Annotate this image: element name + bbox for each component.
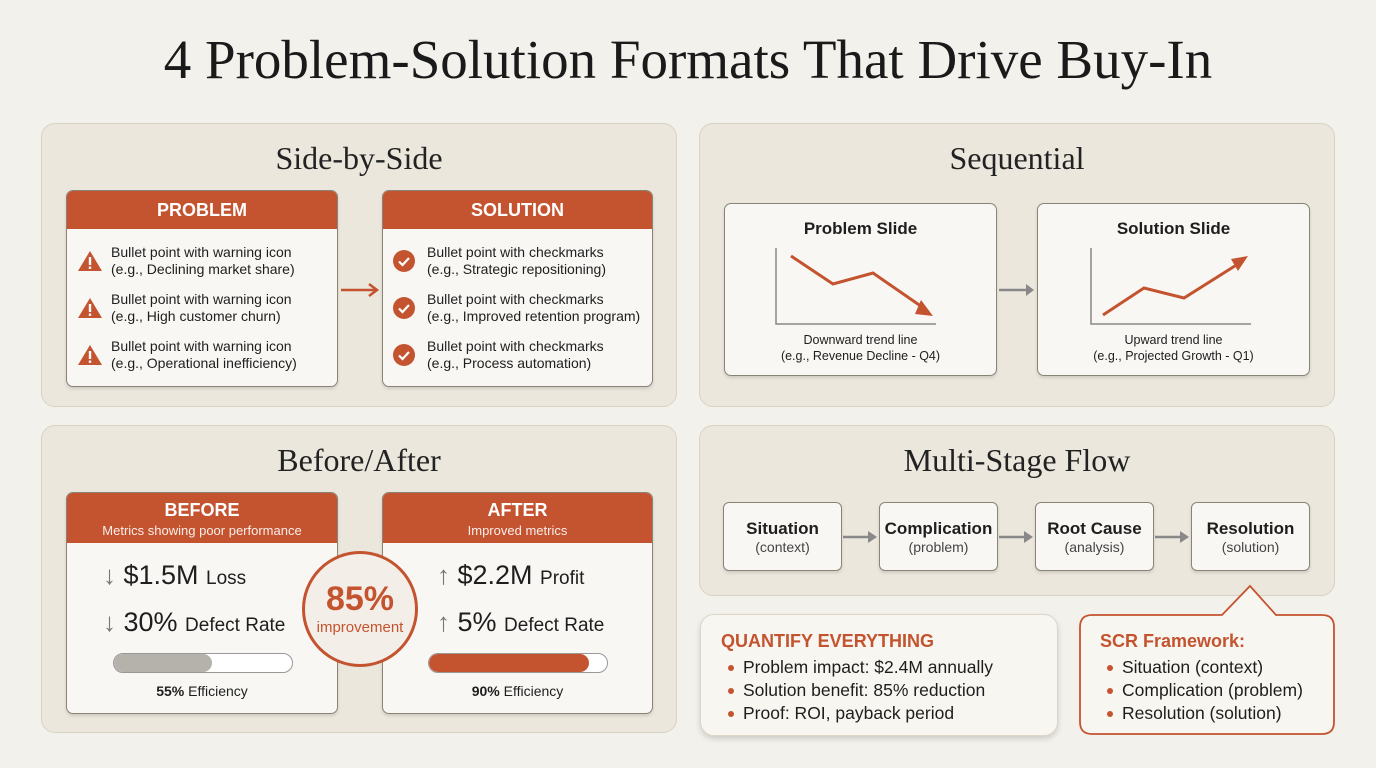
progress bar 90% xyxy=(428,653,608,673)
callout: quantify everything: QUANTIFY EVERYTHING xyxy=(721,631,934,651)
card: solution: Bullet point with checkmarks xyxy=(427,291,604,307)
card: after: Improved metrics xyxy=(468,523,567,538)
panel: sequential xyxy=(699,123,1335,407)
problem item 1 xyxy=(78,244,295,277)
callout: quantify everything: Solution benefit: 85% reduction xyxy=(743,680,985,700)
callout: quantify everything: Problem impact: $2.4M annually xyxy=(743,657,993,677)
card: problem xyxy=(66,190,338,387)
stage: situation: (context) xyxy=(755,539,810,555)
card: problem: Bullet point with warning icon xyxy=(111,338,292,354)
card: solution slide xyxy=(1037,203,1310,376)
callout: 85% improvement circle: improvement xyxy=(317,619,403,636)
card: solution: Bullet point with checkmarks xyxy=(427,244,604,260)
card: solution slide: Upward trend line xyxy=(1125,333,1222,347)
heading: multi-stage flow: Multi-Stage Flow xyxy=(904,442,1130,478)
metric: defect rate: ↓ 30% Defect Rate xyxy=(103,607,285,637)
arrow xyxy=(1155,531,1189,543)
arrow xyxy=(999,531,1033,543)
heading: side-by-side: Side-by-Side xyxy=(275,140,443,176)
stage: resolution: (solution) xyxy=(1222,539,1279,555)
heading: before/after: Before/After xyxy=(277,442,441,478)
card: problem slide: Downward trend line xyxy=(804,333,917,347)
card: problem slide xyxy=(724,203,997,376)
callout: SCR framework: Complication (problem) xyxy=(1122,680,1303,700)
chart: downward trend xyxy=(775,248,936,325)
card: solution: SOLUTION xyxy=(471,200,564,220)
card: before: Metrics showing poor performance xyxy=(102,523,302,538)
callout: quantify everything xyxy=(700,614,1058,736)
callout: 85% improvement circle xyxy=(302,551,418,667)
card: problem: (e.g., Declining market share) xyxy=(111,261,295,277)
title: 4 Problem-Solution Formats That Drive Buy-In xyxy=(164,29,1212,90)
callout: SCR framework: SCR Framework: xyxy=(1100,631,1245,651)
metric: loss: ↓ $1.5M Loss xyxy=(103,560,246,590)
panel: multi-stage flow xyxy=(699,425,1335,596)
card: before xyxy=(66,492,338,714)
problem item 2 xyxy=(78,291,292,324)
stage: complication xyxy=(879,502,998,571)
solution item 1 xyxy=(393,244,606,277)
arrow: problem slide to solution slide xyxy=(999,284,1034,296)
heading: sequential: Sequential xyxy=(949,140,1085,176)
panel: side-by-side xyxy=(41,123,677,407)
card: solution: (e.g., Strategic repositioning) xyxy=(427,261,606,277)
card: after: AFTER xyxy=(488,500,548,520)
card: problem slide: Problem Slide xyxy=(804,219,917,238)
stage: resolution xyxy=(1191,502,1310,571)
metric: defect rate: ↑ 5% Defect Rate xyxy=(437,607,604,637)
card: before: BEFORE xyxy=(164,500,240,520)
card: solution slide: Solution Slide xyxy=(1117,219,1230,238)
chart: upward trend xyxy=(1090,248,1251,325)
callout: SCR framework: Situation (context) xyxy=(1122,657,1263,677)
card: before: 55% Efficiency xyxy=(156,683,248,699)
panel: before/after xyxy=(41,425,677,733)
card: solution: Bullet point with checkmarks xyxy=(427,338,604,354)
stage: complication: (problem) xyxy=(909,539,968,555)
stage: resolution: Resolution xyxy=(1207,519,1294,538)
card: problem: PROBLEM xyxy=(157,200,247,220)
callout: 85% improvement circle: 85% xyxy=(326,580,394,618)
progress bar 55% xyxy=(113,653,293,673)
card: problem: Bullet point with warning icon xyxy=(111,291,292,307)
stage: root cause: Root Cause xyxy=(1047,519,1142,538)
stage: root cause: (analysis) xyxy=(1065,539,1124,555)
card: problem: (e.g., High customer churn) xyxy=(111,308,281,324)
card: solution: (e.g., Process automation) xyxy=(427,355,591,371)
card: solution slide: (e.g., Projected Growth - Q1) xyxy=(1093,349,1254,363)
stage: situation: Situation xyxy=(746,519,819,538)
arrow: problem to solution xyxy=(341,283,379,297)
stage: root cause xyxy=(1035,502,1154,571)
card: after: 90% Efficiency xyxy=(472,683,563,699)
card: after xyxy=(382,492,653,714)
card: problem slide: (e.g., Revenue Decline - Q4) xyxy=(781,349,940,363)
callout: SCR framework: Resolution (solution) xyxy=(1122,703,1282,723)
card: problem: (e.g., Operational inefficiency) xyxy=(111,355,297,371)
callout: SCR framework xyxy=(1079,584,1335,735)
solution item 3 xyxy=(393,338,604,371)
card: problem: Bullet point with warning icon xyxy=(111,244,292,260)
metric: profit: ↑ $2.2M Profit xyxy=(437,560,584,590)
card: solution xyxy=(382,190,653,387)
card: solution: (e.g., Improved retention program) xyxy=(427,308,640,324)
solution item 2 xyxy=(393,291,640,324)
stage: complication: Complication xyxy=(885,519,992,538)
arrow xyxy=(843,531,877,543)
callout: quantify everything: Proof: ROI, payback period xyxy=(743,703,954,723)
problem item 3 xyxy=(78,338,297,371)
stage: situation xyxy=(723,502,842,571)
